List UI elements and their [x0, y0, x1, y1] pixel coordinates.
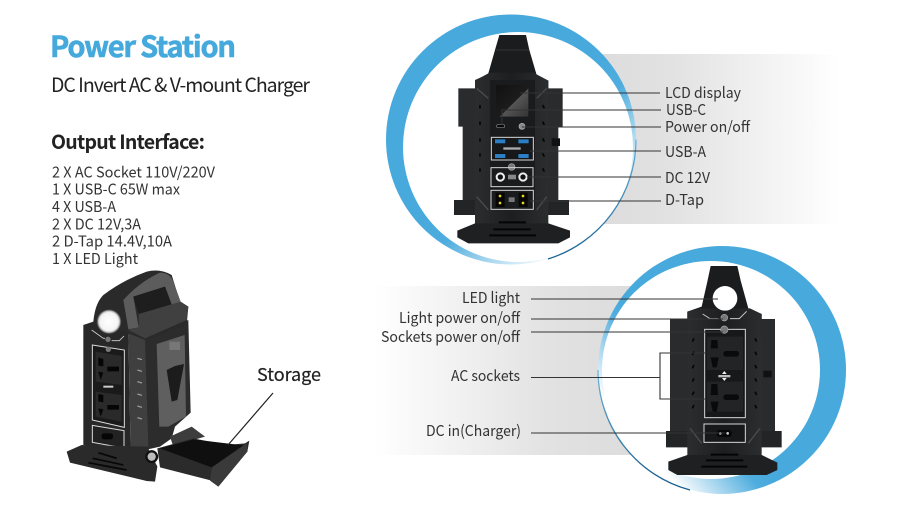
- socket panel: [92, 337, 124, 427]
- power button: [519, 123, 525, 129]
- base: [457, 223, 570, 243]
- main body: [687, 308, 762, 460]
- blue ring: bottom circle: [598, 246, 846, 494]
- hinge: [146, 451, 157, 462]
- output interface list: 1 X LED Light: [52, 248, 138, 269]
- D-Tap box: [491, 190, 533, 209]
- side plates: [670, 319, 688, 440]
- labels: bottom callouts: [381, 287, 521, 441]
- USB-A box: [491, 137, 533, 160]
- labels: bottom callouts: Light power on/off: [399, 307, 521, 328]
- base: [668, 455, 777, 475]
- panel: bottom callout gray background: [375, 286, 640, 455]
- product: bottom view of AC socket panel: [666, 266, 782, 475]
- labels: top callouts: Power on/off: [665, 116, 751, 137]
- leader lines: bottom callouts: [531, 299, 725, 433]
- output interface list: 1 X USB-C 65W max: [52, 179, 180, 200]
- labels: bottom callouts: DC in(Charger): [426, 420, 521, 441]
- V-mount plate: [157, 335, 186, 427]
- labels: bottom callouts: LED light: [462, 287, 520, 308]
- subtitle: DC Invert AC & V-mount Charger: [51, 69, 310, 98]
- leader lines: top callouts: [502, 93, 661, 201]
- light power button: [721, 314, 728, 321]
- storage pointer line: [228, 393, 273, 445]
- labels: top callouts: USB-A: [665, 141, 707, 162]
- handle: [123, 273, 181, 329]
- output interface list: 4 X USB-A: [52, 196, 117, 217]
- blue ring: top circle: [386, 14, 636, 264]
- panel: top callout gray background: [600, 54, 840, 224]
- back V-mount housing: [143, 320, 191, 450]
- labels: top callouts: D-Tap: [665, 189, 704, 210]
- USB-C port: [497, 125, 505, 128]
- product: 3D grayscale photo with storage tray: [67, 271, 249, 487]
- DC 12V box: [491, 164, 533, 187]
- labels: top callouts: USB-C: [666, 99, 706, 120]
- storage tray: [157, 438, 249, 487]
- base: [67, 445, 157, 482]
- LED light glowing: [96, 309, 122, 334]
- side face with vents: [128, 333, 148, 453]
- latch and battery contact: [170, 427, 205, 447]
- LED light opening: [713, 286, 737, 311]
- labels: bottom callouts: AC sockets: [451, 365, 520, 386]
- heading: output interface: Output Interface:: [51, 126, 205, 155]
- dome top: [83, 271, 188, 341]
- output interface list: 2 D-Tap 14.4V,10A: [52, 231, 173, 252]
- AC sockets box: [705, 326, 745, 418]
- front body: [83, 323, 131, 452]
- output interface list: [52, 161, 215, 269]
- labels: top callouts: DC 12V: [665, 167, 710, 188]
- DC in panel: [92, 425, 124, 448]
- title: Power Station: [50, 24, 236, 66]
- labels: top callouts: [665, 82, 751, 210]
- product: top view of USB and DC panel: [454, 35, 570, 243]
- handle tower: [475, 35, 548, 110]
- side plates: [458, 88, 477, 210]
- handle opening with vents: [133, 287, 172, 314]
- labels: top callouts: LCD display: [665, 82, 741, 103]
- LCD display: [496, 85, 528, 117]
- labels: bottom callouts: Sockets power on/off: [381, 326, 521, 347]
- tower and handle: [687, 266, 762, 340]
- label: storage: Storage: [257, 361, 321, 387]
- DC in box: [704, 424, 745, 442]
- main body: [475, 73, 548, 228]
- output interface list: 2 X DC 12V,3A: [52, 213, 142, 234]
- output interface list: 2 X AC Socket 110V/220V: [52, 161, 215, 182]
